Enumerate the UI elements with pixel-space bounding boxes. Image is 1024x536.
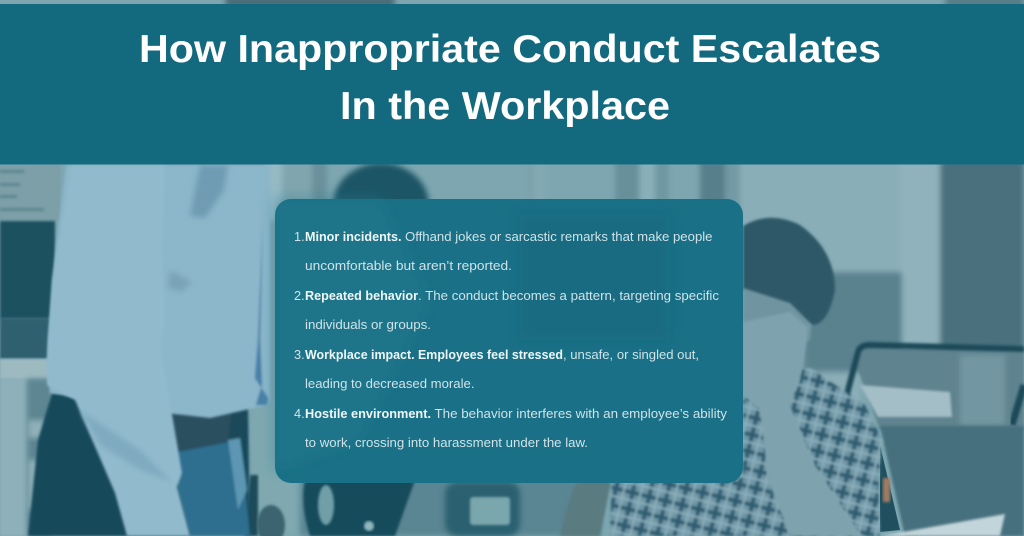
step 3: workplace impact: , unsafe, or singled out, (563, 347, 699, 362)
step 3: workplace impact: leading to decreased morale. (305, 376, 474, 391)
step 1: minor incidents: uncomfortable but aren’t reported. (305, 258, 512, 273)
step 1: minor incidents: Offhand jokes or sarcastic remarks that make people (405, 229, 712, 244)
step 2: repeated behavior: Repeated behavior (305, 288, 418, 303)
title: In the Workplace (340, 85, 670, 128)
left office and monitor (0, 165, 60, 536)
step 2: repeated behavior: . The conduct becomes a pattern, targeting specific (418, 288, 720, 303)
seated man: head (743, 218, 835, 325)
step 4: hostile environment: to work, crossing into harassment under the law. (305, 435, 588, 450)
step 2: repeated behavior: 2. (294, 288, 305, 303)
standing man: trousers (28, 393, 250, 536)
seated man: shirt (610, 368, 882, 536)
background colleague head (333, 163, 429, 247)
step 2: repeated behavior: individuals or groups. (305, 317, 431, 332)
right desk and chairs (846, 345, 1024, 536)
top title band (0, 4, 1024, 164)
standing man: shirt torso (47, 165, 270, 418)
step 4: hostile environment (294, 406, 728, 450)
laptop (880, 514, 1005, 536)
step 1: minor incidents: Minor incidents. (305, 229, 402, 244)
step 4: hostile environment: The behavior interferes with an employee’s ability (434, 406, 728, 421)
step 1: minor incidents (294, 229, 712, 273)
step 4: hostile environment: Hostile environment. (305, 406, 431, 421)
step 3: workplace impact: Workplace impact. Employees feel stressed (305, 347, 563, 362)
background wall stripes (266, 160, 286, 220)
title (139, 28, 881, 128)
step 4: hostile environment: 4. (294, 406, 305, 421)
step 1: minor incidents: 1. (294, 229, 305, 244)
step 2: repeated behavior (294, 288, 720, 332)
standing man: sleeve (47, 165, 190, 536)
seated man: hand and arm (743, 312, 862, 536)
step 3: workplace impact: 3. (294, 347, 305, 362)
right wall and window (740, 160, 1024, 412)
panel: escalation steps (275, 199, 743, 483)
lower office chair background (245, 400, 612, 536)
title: How Inappropriate Conduct Escalates (139, 28, 881, 71)
step 3: workplace impact (294, 347, 699, 391)
